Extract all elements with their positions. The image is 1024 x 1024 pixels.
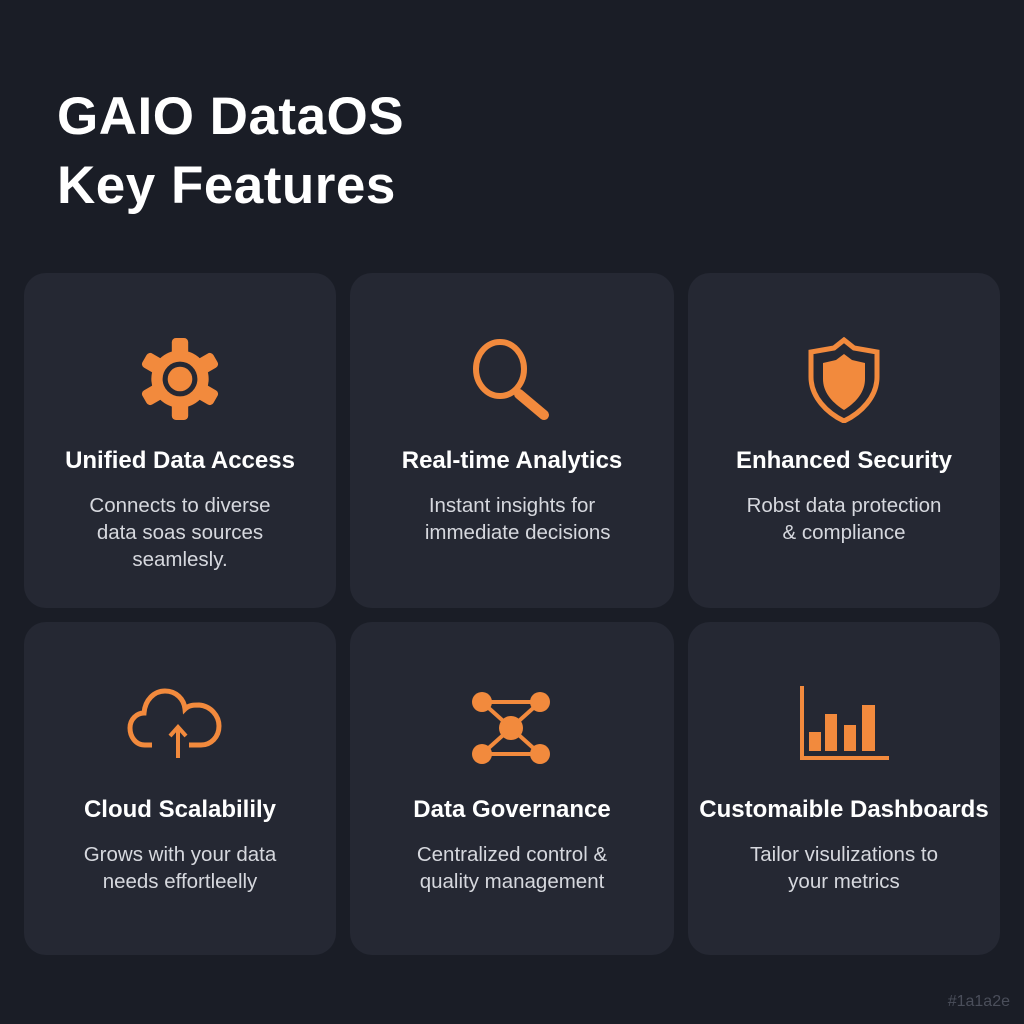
icon: network (472, 692, 550, 764)
title: Key Features (57, 156, 396, 215)
heading: Data Governance (413, 796, 611, 823)
text: Robst data protection (747, 494, 941, 517)
text: Instant insights for (429, 494, 595, 517)
title: GAIO DataOS (57, 87, 404, 146)
panel: enhanced security (688, 273, 1000, 608)
panel: unified data access (24, 273, 336, 608)
panel: customizable dashboards (688, 622, 1000, 955)
text: your metrics (788, 870, 900, 893)
text (417, 843, 607, 893)
icon: gear (142, 338, 218, 420)
icon: bar chart (800, 686, 889, 760)
text: & compliance (782, 521, 906, 544)
text: seamlesly. (132, 548, 228, 571)
text (84, 843, 276, 893)
panel: real-time analytics (350, 273, 674, 608)
text: immediate decisions (425, 521, 611, 544)
text (89, 494, 271, 571)
text: Centralized control & (417, 843, 607, 866)
icon: cloud upload (128, 688, 222, 758)
text: needs effortleelly (103, 870, 257, 893)
text: Tailor visulizations to (750, 843, 938, 866)
text (750, 843, 938, 893)
text (425, 494, 611, 544)
title (57, 87, 404, 215)
icon: magnifier (473, 339, 549, 420)
heading: Unified Data Access (65, 447, 295, 474)
text: Connects to diverse (89, 494, 271, 517)
icon: shield (808, 337, 880, 423)
heading: Cloud Scalabilily (84, 796, 276, 823)
text: data soas sources (97, 521, 263, 544)
heading: Enhanced Security (736, 447, 952, 474)
text (747, 494, 941, 544)
heading: Real-time Analytics (402, 447, 622, 474)
panel: cloud scalability (24, 622, 336, 955)
footer label: #1a1a2e (948, 993, 1010, 1010)
panel: data governance (350, 622, 674, 955)
text: Grows with your data (84, 843, 276, 866)
text: quality management (420, 870, 604, 893)
heading: Customaible Dashboards (699, 796, 989, 823)
